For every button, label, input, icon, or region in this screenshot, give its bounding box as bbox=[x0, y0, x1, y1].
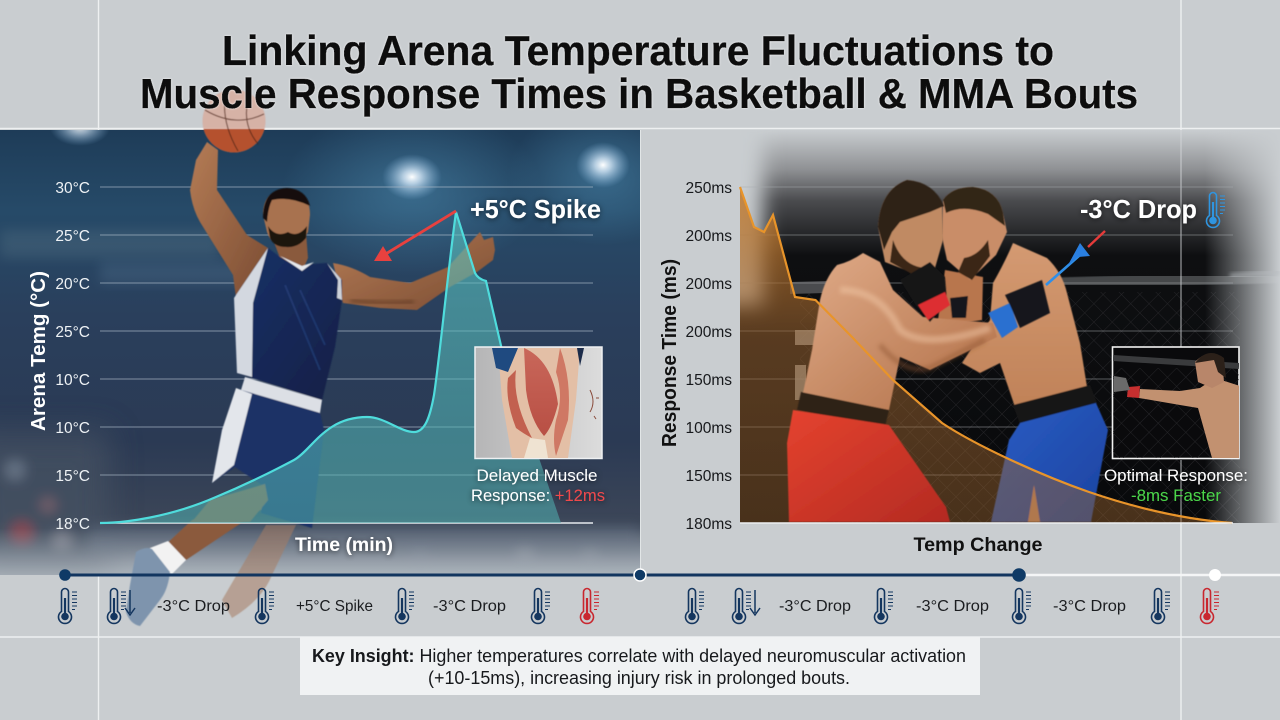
icon: thermometer 2 bbox=[256, 588, 274, 623]
jersey bbox=[234, 248, 342, 400]
red wrist glove bbox=[900, 262, 950, 322]
x axis title: Time (min) bbox=[295, 535, 393, 556]
y axis labels: 150ms bbox=[685, 468, 732, 485]
y axis title: Arena Temg (°C) bbox=[28, 271, 50, 431]
reaching arm bbox=[333, 232, 495, 310]
x axis title: Temp Change bbox=[914, 535, 1042, 556]
icon: blue thermometer bbox=[1206, 192, 1225, 227]
icon: red thermometer right bbox=[1200, 588, 1219, 623]
fighter: red shorts bbox=[787, 180, 1050, 522]
y axis labels: 10°C bbox=[55, 372, 90, 389]
y axis labels: 180ms bbox=[685, 516, 732, 533]
neck and head bbox=[270, 232, 308, 272]
timeline bbox=[59, 568, 1280, 582]
y axis labels: 150ms bbox=[685, 372, 732, 389]
panel: MMA bout chart bbox=[659, 110, 1280, 556]
icon: thermometer 8 bbox=[1152, 588, 1170, 623]
y axis labels: 15°C bbox=[55, 468, 90, 485]
vertical cage guide bbox=[1180, 130, 1182, 523]
y axis title: Response Time (ms) bbox=[659, 259, 681, 447]
label: -3°C Drop bbox=[916, 598, 989, 615]
icon: thermometer 3 bbox=[396, 588, 414, 623]
inset caption: optimal response: -8ms Faster bbox=[1131, 486, 1221, 505]
key insight text: (+10-15ms), increasing injury risk in prolonged bouts. bbox=[428, 668, 850, 688]
label: -3°C Drop bbox=[1053, 598, 1126, 615]
title: Muscle Response Times in Basketball & MMA Bouts bbox=[140, 70, 1138, 117]
rail remainder bbox=[1230, 272, 1280, 276]
inset caption: delayed muscle response: Delayed Muscle bbox=[476, 466, 598, 485]
y axis labels: 200ms bbox=[685, 276, 732, 293]
key insight callout bbox=[300, 637, 980, 695]
back leg bbox=[222, 525, 296, 618]
title: Linking Arena Temperature Fluctuations to bbox=[222, 27, 1054, 74]
label: +5°C Spike bbox=[296, 598, 373, 615]
label: -3°C Drop bbox=[157, 598, 230, 615]
icon: thermometer with down arrow right bbox=[732, 588, 760, 623]
label: -3°C Drop bbox=[779, 598, 851, 615]
callout: +5°C spike: +5°C Spike bbox=[470, 194, 601, 224]
panel: basketball arena chart bbox=[0, 90, 698, 626]
basketball bbox=[202, 90, 266, 152]
inset caption: delayed muscle response: Response: +12ms bbox=[471, 486, 605, 505]
y axis gridlines bbox=[100, 187, 593, 475]
label: -3°C Drop bbox=[433, 598, 506, 615]
y axis labels: 200ms bbox=[685, 324, 732, 341]
y axis labels: 30°C bbox=[55, 180, 90, 197]
y axis labels: 250ms bbox=[685, 180, 732, 197]
arena background photo bbox=[0, 105, 698, 590]
y axis labels: 10°C bbox=[55, 420, 90, 437]
jersey white panel bbox=[234, 248, 268, 377]
arrow: spike bbox=[374, 211, 456, 261]
arrow: drop bbox=[1046, 231, 1105, 285]
inset caption: optimal response: Optimal Response: bbox=[1104, 466, 1248, 485]
icon: thermometer 5 bbox=[686, 588, 704, 623]
fighter: blue shorts bbox=[937, 187, 1108, 522]
y axis labels: 25°C bbox=[55, 228, 90, 245]
front lower leg and shoe bbox=[162, 490, 268, 560]
timeline markers and labels bbox=[58, 588, 1219, 623]
y axis labels: 25°C bbox=[55, 324, 90, 341]
callout: -3°C drop: -3°C Drop bbox=[1080, 194, 1197, 224]
shorts bbox=[212, 390, 324, 528]
y axis labels bbox=[55, 180, 90, 533]
key insight text: Key Insight: Higher temperatures correlate with delayed neuromuscular activation bbox=[312, 646, 966, 666]
inset: fighter punching bbox=[1112, 347, 1240, 458]
title bbox=[140, 27, 1138, 117]
knee bbox=[190, 484, 268, 524]
icon: thermometer 7 bbox=[1012, 588, 1031, 623]
raised arm bbox=[190, 142, 268, 298]
area chart: temperature bbox=[100, 212, 561, 523]
basketball player bbox=[126, 90, 495, 626]
icon: thermometer 1 bbox=[58, 588, 77, 623]
blue wrist glove bbox=[988, 280, 1050, 338]
torso bbox=[962, 243, 1087, 407]
icon: thermometer 6 bbox=[874, 588, 893, 623]
belt bbox=[797, 392, 889, 427]
head bbox=[942, 187, 1007, 280]
key insight text bbox=[312, 646, 966, 688]
inset caption: optimal response bbox=[1104, 466, 1248, 505]
sign boards bbox=[795, 330, 816, 400]
y axis labels: 200ms bbox=[685, 228, 732, 245]
y axis labels: 18°C bbox=[55, 516, 90, 533]
waistband bbox=[241, 377, 322, 413]
icon: thermometer 4 bbox=[532, 588, 550, 623]
head bbox=[878, 180, 943, 273]
area line: response time bbox=[740, 187, 1232, 523]
inset: muscle illustration bbox=[475, 347, 602, 458]
inset caption: delayed muscle response bbox=[471, 466, 605, 505]
icon: thermometer with down arrow bbox=[108, 588, 135, 623]
shorts bbox=[787, 410, 950, 522]
far arm bbox=[937, 270, 983, 327]
area chart: response time bbox=[740, 187, 1232, 523]
y axis labels: 20°C bbox=[55, 276, 90, 293]
y axis gridlines bbox=[740, 187, 1233, 475]
cage background photo bbox=[740, 135, 1277, 523]
icon: red thermometer bbox=[580, 588, 599, 623]
y axis labels bbox=[685, 180, 732, 533]
torso and arm bbox=[803, 253, 997, 410]
y axis labels: 100ms bbox=[685, 420, 732, 437]
